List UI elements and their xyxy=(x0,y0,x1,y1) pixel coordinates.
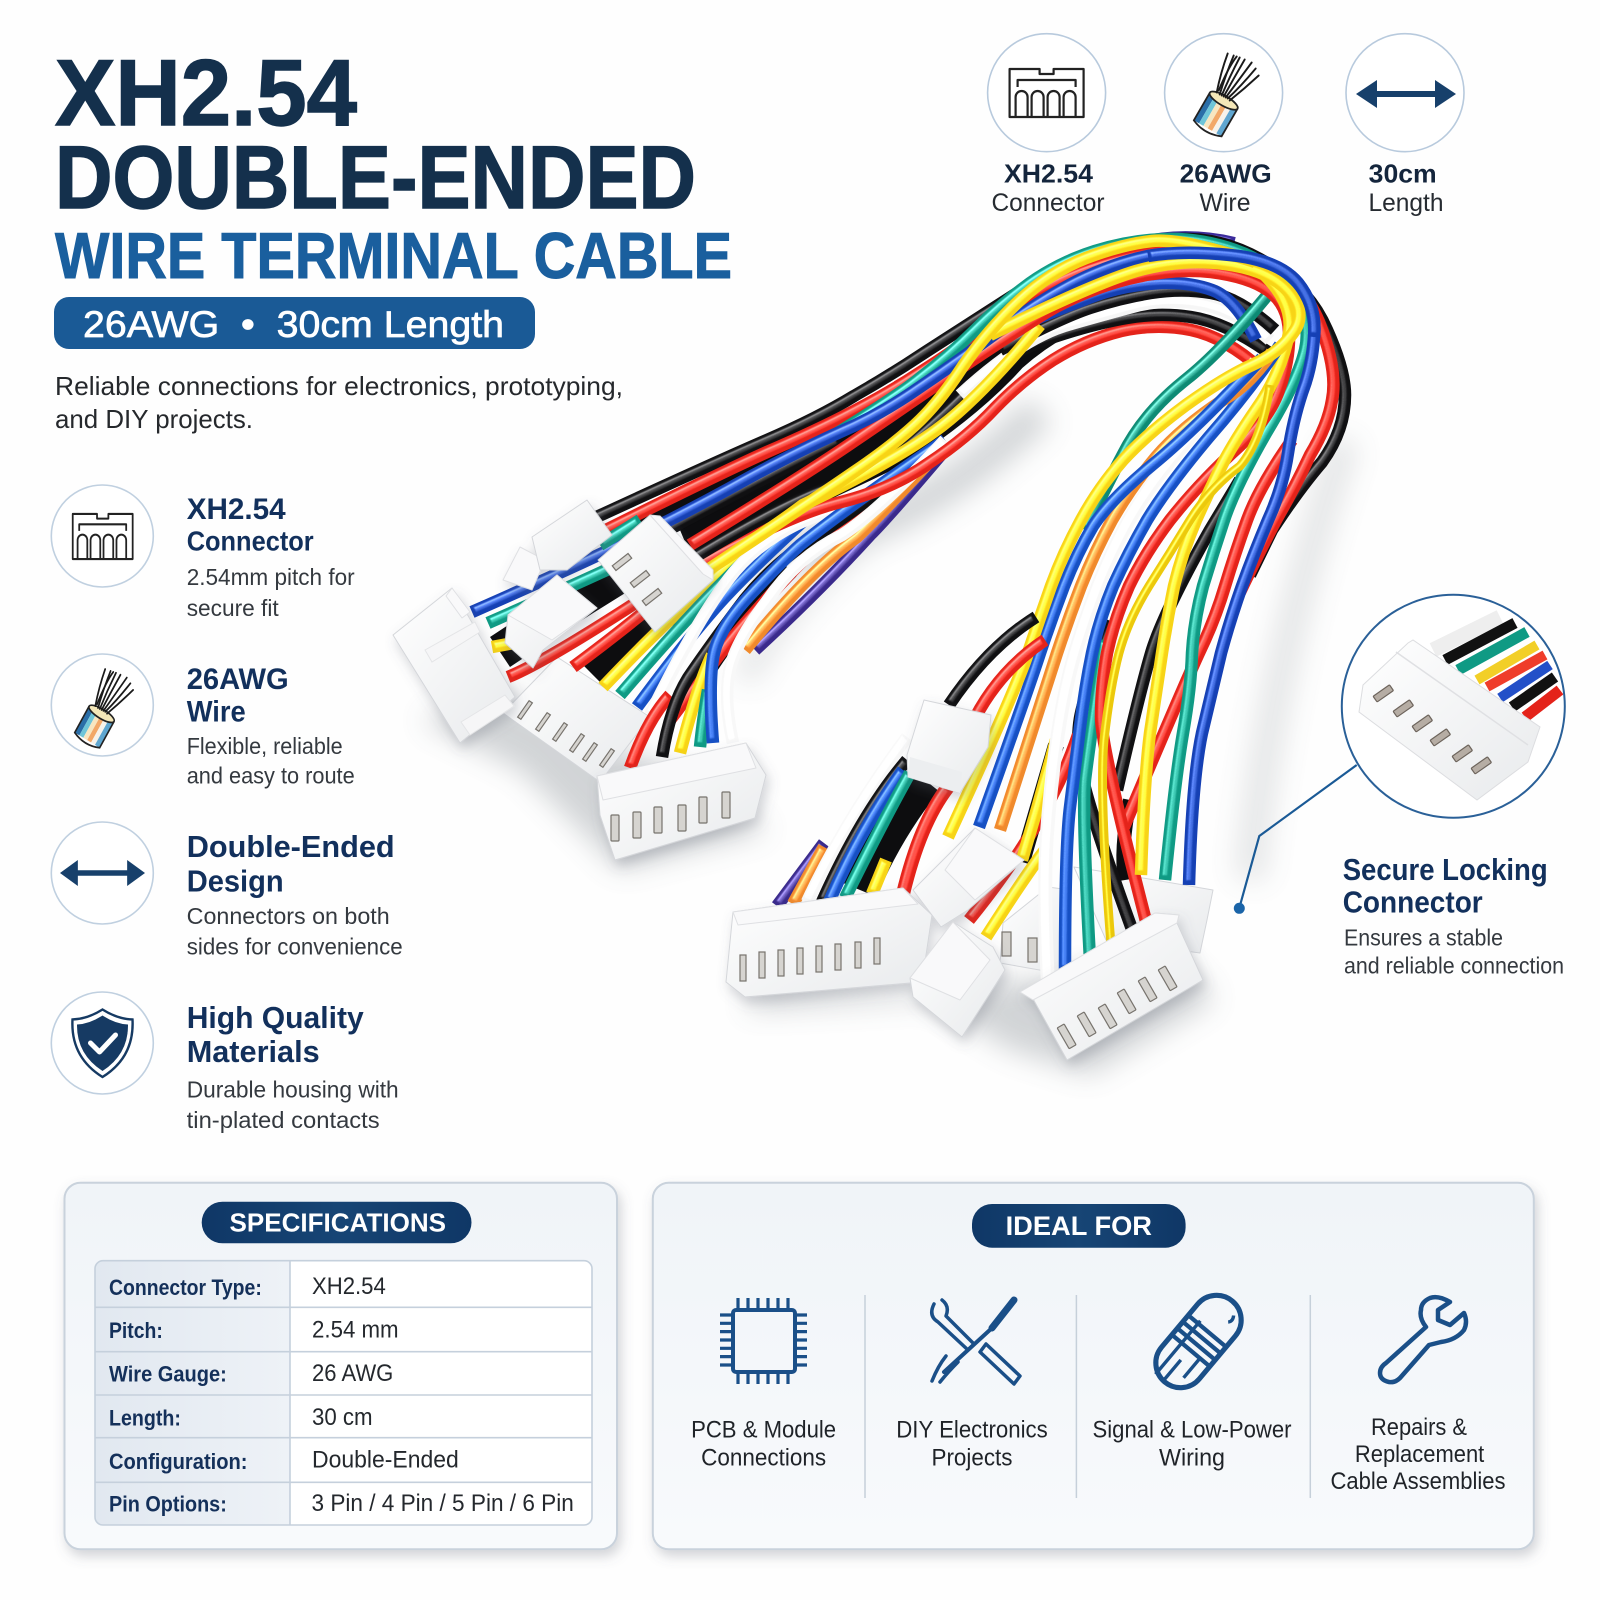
feature: double-ended xyxy=(51,822,403,959)
row: length: 30 cm xyxy=(312,1404,373,1431)
row: pin options: 3 Pin / 4 Pin / 5 Pin / 6 Pin xyxy=(312,1490,574,1517)
connector: small middle xyxy=(913,828,1024,927)
front yellow wires xyxy=(700,241,1314,837)
row: configuration: Double-Ended xyxy=(312,1447,459,1474)
title line 2: DOUBLE-ENDED xyxy=(55,127,696,227)
item: repairs: Cable Assemblies xyxy=(1330,1468,1506,1495)
connector: rear 6-pin right xyxy=(1074,867,1213,953)
feature: double-ended: Double-Ended xyxy=(187,829,395,864)
right bundle lower wires xyxy=(969,345,1280,985)
connector: small lower xyxy=(910,922,1005,1037)
feature: wire xyxy=(51,654,355,788)
connector: small top right xyxy=(907,700,991,793)
intro text xyxy=(55,371,623,434)
header title block xyxy=(54,40,732,434)
callout heading: Secure Locking xyxy=(1343,852,1548,887)
intro text: Reliable connections for electronics, prototyping, xyxy=(55,371,623,401)
row: wire gauge: Wire Gauge: xyxy=(109,1362,227,1387)
row: pitch: 2.54 mm xyxy=(312,1317,399,1344)
feature: wire: Wire xyxy=(187,696,246,728)
row: length: Length: xyxy=(109,1406,181,1431)
feature: double-ended: Design xyxy=(187,864,284,898)
row: pin options: Pin Options: xyxy=(109,1492,227,1517)
item: diy: DIY Electronics xyxy=(896,1417,1048,1444)
connectors behind the wires xyxy=(503,657,1213,975)
item: signal: Signal & Low-Power xyxy=(1092,1417,1292,1444)
black filler wires xyxy=(500,280,1130,890)
leader line xyxy=(1239,765,1357,908)
feature: connector: 2.54mm pitch for xyxy=(187,564,355,590)
connector: 8-pin xyxy=(726,888,932,997)
connector: rear 6-pin middle xyxy=(1000,887,1070,975)
connector: rear 3-pin xyxy=(503,500,612,590)
lower left wire group xyxy=(573,440,945,768)
icon: chip xyxy=(720,1298,807,1384)
row: pitch xyxy=(109,1317,399,1344)
feature: quality: Durable housing with xyxy=(187,1076,399,1102)
feature: quality: Materials xyxy=(187,1034,320,1069)
main arch wires xyxy=(472,239,1345,960)
title line 1: XH2.54 xyxy=(55,40,357,145)
row: wire gauge: 26 AWG xyxy=(312,1360,393,1387)
item: diy xyxy=(896,1300,1048,1472)
connector: small middle left xyxy=(505,575,597,668)
row: configuration xyxy=(109,1447,459,1474)
spec: connector xyxy=(988,34,1106,217)
feature: connector: XH2.54 xyxy=(187,493,286,526)
item: pcb xyxy=(691,1298,836,1472)
subtitle pill: 26AWG • 30cm Length xyxy=(83,304,504,345)
specifications heading pill xyxy=(202,1202,471,1243)
zoom circle xyxy=(1342,595,1565,818)
spec: connector: Connector xyxy=(992,189,1104,217)
connector: left side-view block xyxy=(393,588,515,743)
zoomed connector xyxy=(1359,617,1560,800)
left feature list xyxy=(51,485,403,1133)
feature: wire: and easy to route xyxy=(187,762,355,788)
item: pcb: PCB & Module xyxy=(691,1417,836,1444)
top spec icons xyxy=(988,34,1464,217)
specifications table xyxy=(95,1261,592,1525)
soft shadows xyxy=(420,410,1345,1075)
item: signal: Wiring xyxy=(1159,1445,1225,1472)
row: connector type: XH2.54 xyxy=(312,1273,386,1300)
item: repairs: Repairs & xyxy=(1371,1414,1467,1441)
intro text: and DIY projects. xyxy=(55,404,253,434)
item: signal xyxy=(1092,1285,1292,1472)
callout: secure locking connector xyxy=(1234,595,1565,978)
connector: 6-pin left xyxy=(597,743,766,860)
feature: quality: tin-plated contacts xyxy=(187,1107,380,1133)
connector: 6-pin front right xyxy=(1020,913,1203,1060)
inner arch wires xyxy=(690,234,1275,570)
panel: specifications xyxy=(64,1183,617,1549)
spec: connector: XH2.54 xyxy=(1004,159,1094,189)
connector: rear 6-pin left xyxy=(503,657,650,782)
connectors in front of the wires xyxy=(393,500,1203,1060)
callout description: and reliable connection xyxy=(1344,952,1564,978)
short wires near small connectors xyxy=(488,520,1045,906)
product photo: wire harness xyxy=(393,234,1345,1075)
spec: length: 30cm xyxy=(1369,159,1437,189)
spec: wire: Wire xyxy=(1200,189,1250,217)
row: length xyxy=(109,1404,373,1431)
feature: connector xyxy=(51,485,355,621)
callout heading: Connector xyxy=(1343,885,1483,920)
leader dot xyxy=(1234,903,1245,914)
ideal for heading pill xyxy=(972,1204,1186,1248)
item: diy: Projects xyxy=(932,1445,1012,1472)
item: repairs: Replacement xyxy=(1355,1441,1485,1468)
panel: ideal for xyxy=(653,1183,1534,1549)
feature: double-ended: sides for convenience xyxy=(187,933,403,959)
feature: double-ended: Connectors on both xyxy=(187,903,390,929)
spec: length: Length xyxy=(1368,189,1444,217)
icon: coiled cable xyxy=(1145,1285,1252,1398)
callout heading xyxy=(1343,852,1548,920)
callout description xyxy=(1344,925,1564,978)
spec: length xyxy=(1346,34,1464,217)
ideal for heading pill: IDEAL FOR xyxy=(1006,1211,1152,1241)
row: pin options xyxy=(109,1490,574,1517)
connector: front 3-pin xyxy=(598,515,713,632)
subtitle pill xyxy=(54,297,535,349)
spec: wire xyxy=(1165,34,1283,217)
row: wire gauge xyxy=(109,1360,393,1387)
icon: shield xyxy=(72,1010,133,1077)
item: repairs xyxy=(1330,1297,1506,1495)
item: pcb: Connections xyxy=(701,1445,826,1472)
feature: connector: Connector xyxy=(187,526,314,557)
specifications heading pill: SPECIFICATIONS xyxy=(230,1208,446,1238)
title line 3: WIRE TERMINAL CABLE xyxy=(55,219,732,292)
wire bundle xyxy=(472,234,1345,985)
callout description: Ensures a stable xyxy=(1344,925,1503,951)
row: connector type: Connector Type: xyxy=(109,1275,262,1300)
row: connector type xyxy=(109,1273,386,1300)
feature: wire: Flexible, reliable xyxy=(187,733,343,759)
spec: wire: 26AWG xyxy=(1180,159,1272,189)
feature: wire: 26AWG xyxy=(187,663,289,696)
icon: wrench xyxy=(1380,1297,1466,1382)
row: pitch: Pitch: xyxy=(109,1318,163,1343)
feature: quality xyxy=(51,992,399,1133)
feature: quality: High Quality xyxy=(187,1000,364,1035)
icon: crossed tools xyxy=(932,1300,1020,1384)
feature: connector: secure fit xyxy=(187,595,279,621)
row: configuration: Configuration: xyxy=(109,1449,248,1474)
